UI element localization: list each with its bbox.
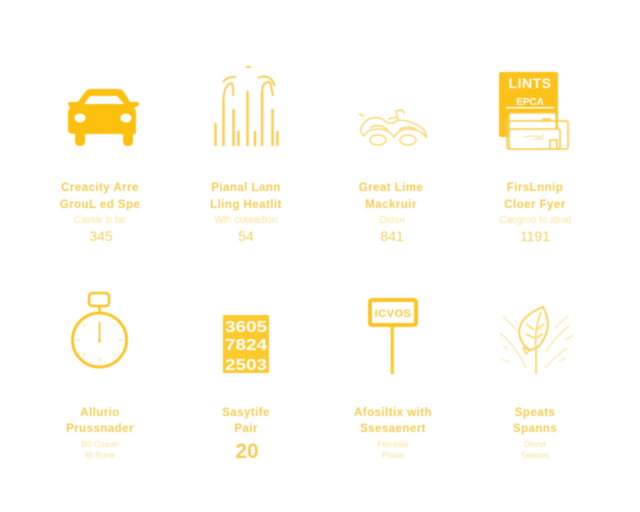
heading: leaf: Spanns: [513, 423, 557, 435]
panel: stopwatch statistic: [66, 293, 134, 460]
panel: leaf statistic: [500, 307, 573, 460]
heading: signpost: Ssesaenert: [360, 423, 426, 435]
heading: leaf: [513, 407, 557, 435]
text: stopwatch caption: B0 Gsson: [81, 439, 119, 449]
heading: motorcycle: [359, 182, 423, 211]
panel: car statistic: [60, 89, 140, 244]
panel: number grid statistic: [222, 315, 270, 463]
text: signpost caption: Ptoolate: [377, 439, 409, 449]
icon: leaf: [500, 307, 573, 374]
icon: number grid: 7824: [225, 337, 267, 354]
icon: motorcycle: [359, 110, 426, 145]
text: motorcycle caption: Dlosn: [379, 215, 405, 226]
panel: tickets statistic: [499, 72, 571, 244]
heading: bars: [210, 182, 282, 211]
heading: bars: Lling Heatlit: [210, 199, 282, 211]
text: tickets caption: Cacgmo lo alnal: [499, 215, 571, 226]
heading: number grid: Pair: [234, 423, 258, 435]
heading: signpost: Afosiltix with: [354, 407, 432, 419]
heading: leaf: Speats: [515, 407, 555, 419]
text: signpost caption: [377, 439, 409, 460]
text: signpost caption: Ptaas: [382, 450, 404, 460]
number: tickets: 1191: [520, 228, 550, 244]
icon: number grid: 3605: [225, 319, 267, 336]
heading: car: Creacity Arre: [61, 182, 139, 194]
icon: number grid: 2503: [225, 357, 267, 374]
panel: motorcycle statistic: [359, 110, 426, 244]
text: leaf caption: Dsovl: [524, 439, 546, 449]
number: bars: 54: [238, 228, 254, 244]
text: car caption: Castar b.far: [74, 215, 127, 226]
icon: signpost: ICVOS: [375, 308, 411, 320]
text: leaf caption: [521, 439, 549, 460]
icon: stopwatch: [72, 293, 126, 367]
heading: bars: Pianal Lann: [211, 182, 281, 194]
heading: car: GrouL ed Spe: [60, 199, 140, 211]
heading: tickets: FirsLnnip: [507, 182, 563, 194]
heading: motorcycle: Mackruir: [365, 199, 417, 211]
heading: signpost: [354, 407, 432, 435]
icon: number grid: [223, 315, 269, 374]
text: leaf caption: Seasos: [521, 450, 549, 460]
heading: tickets: [504, 182, 566, 211]
text: bars caption: Wlh cotaadlon: [214, 215, 278, 226]
icon: sign and tickets: EPCA: [516, 97, 544, 108]
icon: car: [68, 89, 139, 146]
panel: signpost statistic: [354, 300, 432, 460]
heading: car: [60, 182, 140, 211]
heading: tickets: Cloer Fyer: [504, 199, 566, 211]
icon: bars with arrows: [216, 67, 278, 146]
number: number grid: 20: [235, 440, 259, 463]
number: motorcycle: 841: [380, 228, 404, 244]
heading: stopwatch: Allurio: [80, 407, 120, 419]
text: stopwatch caption: Bl Bone: [85, 450, 115, 460]
heading: stopwatch: Prussnader: [66, 423, 134, 435]
icon: signpost: [370, 300, 416, 374]
heading: stopwatch: [66, 407, 134, 435]
icon: sign and tickets: LINTS: [509, 75, 551, 91]
number: car: 345: [89, 228, 113, 244]
heading: motorcycle: Great Lime: [359, 182, 423, 194]
text: stopwatch caption: [81, 439, 119, 460]
icon: sign and tickets: [499, 72, 568, 149]
panel: bars statistic: [210, 67, 282, 244]
heading: number grid: [222, 407, 270, 435]
heading: number grid: Sasytife: [222, 407, 270, 419]
